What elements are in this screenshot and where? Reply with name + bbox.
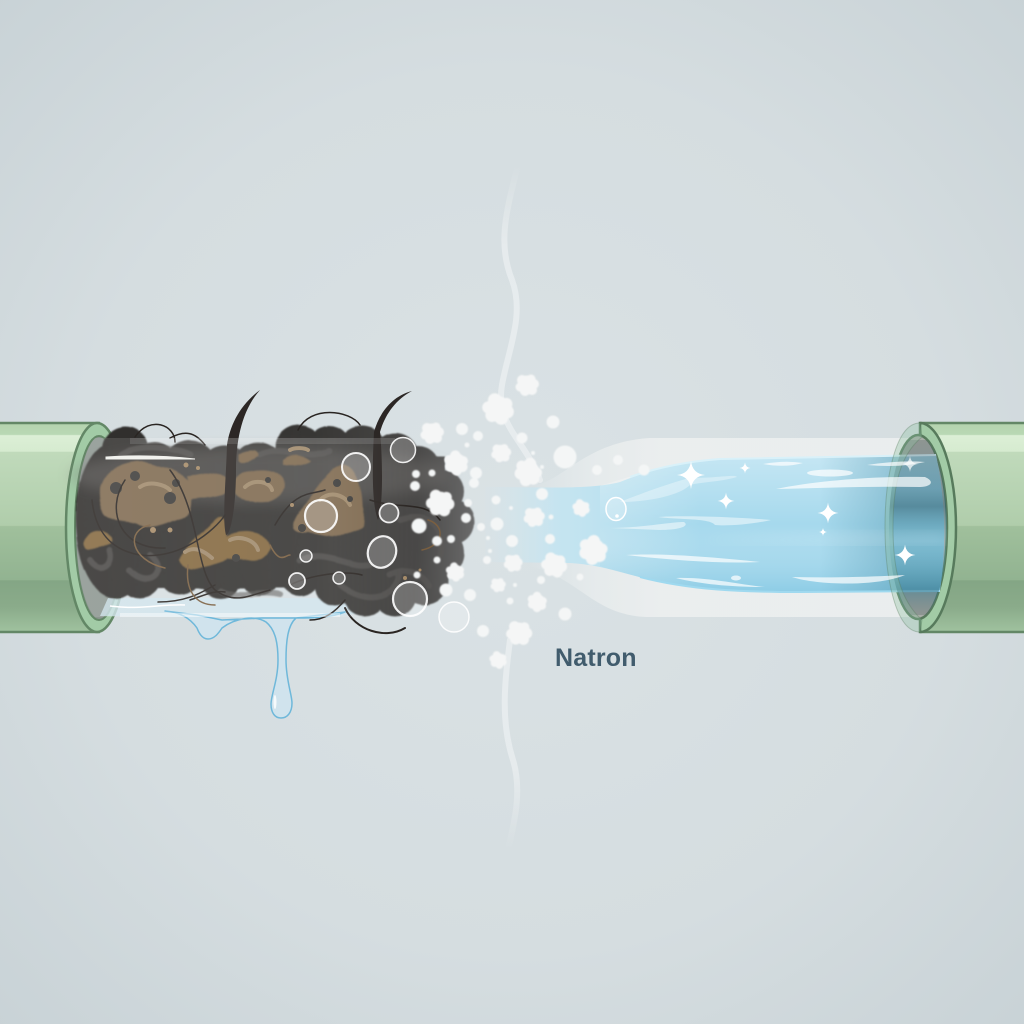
lighter grime highlights bbox=[140, 448, 350, 558]
clean water stream bbox=[485, 455, 945, 592]
sparkles in water bbox=[677, 456, 918, 566]
natron small particles bbox=[410, 416, 650, 637]
natron powder puffs bbox=[420, 374, 613, 672]
lighter upper haze on cloud bbox=[70, 447, 450, 503]
water highlights bbox=[610, 461, 931, 587]
tangled hair strands bbox=[92, 412, 440, 633]
mottled dark swirls bbox=[90, 448, 441, 597]
brown grime blobs bbox=[100, 451, 363, 535]
glass tube right section bbox=[520, 438, 925, 617]
leaking water under the clog bbox=[100, 598, 375, 718]
label: Natron: Natron bbox=[555, 644, 637, 672]
dark cloud mass bbox=[75, 425, 475, 616]
dark hair stems bbox=[224, 390, 260, 535]
dark holes in grime bbox=[110, 471, 353, 562]
water tint inside pipe mouth bbox=[889, 440, 947, 615]
faint wavy divider line bbox=[501, 165, 540, 850]
clog of hair and grime bbox=[70, 390, 475, 633]
glass tube left section bbox=[76, 438, 420, 617]
saturated lower grime blobs bbox=[83, 517, 270, 568]
grime specks bbox=[150, 462, 422, 580]
left green pipe bbox=[0, 423, 128, 632]
air bubbles on clog bbox=[289, 438, 469, 632]
right green pipe bbox=[889, 423, 1024, 632]
translucent front rim of right pipe bbox=[885, 423, 922, 632]
bubble in water stream bbox=[606, 498, 626, 520]
